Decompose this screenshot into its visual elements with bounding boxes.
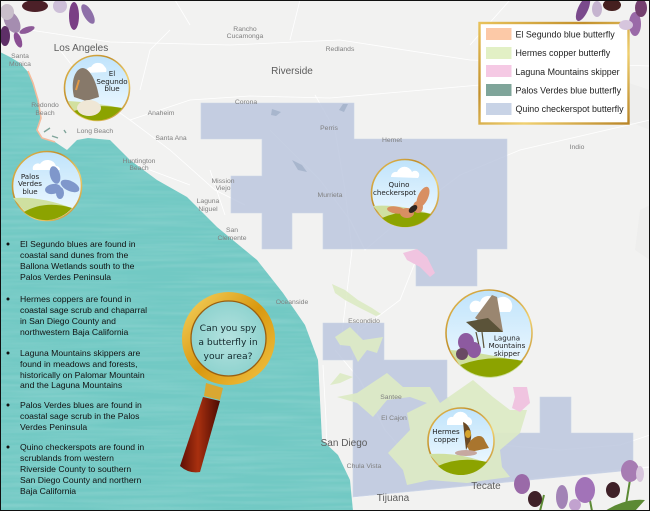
bullet: El Segundo blues: Ballona Wetlands south to the (20, 261, 135, 271)
bullet: Palos Verdes blues (6, 400, 142, 432)
map labels: Long Beach (77, 128, 113, 135)
bullet: Hermes coppers: northwestern Baja California (20, 327, 129, 337)
bullet: Laguna Mountains skippers: found in meadows and forests, (20, 359, 137, 369)
bullet: Hermes coppers: Hermes coppers are found in (20, 294, 131, 304)
icon: butterfly (44, 165, 81, 199)
badge: Palos Verdes blue: blue (22, 187, 38, 196)
bullet: Laguna Mountains skippers (6, 348, 145, 390)
badge: Hermes copper: Hermes (432, 427, 460, 436)
bullet: Quino checkerspots (6, 442, 144, 496)
bullet: Hermes coppers (6, 294, 147, 337)
flowers: bottom right (514, 460, 645, 511)
map labels: Santa (11, 53, 29, 60)
bullet: Quino checkerspots: Baja California (20, 486, 76, 496)
bullet: Palos Verdes blues: coastal sage scrub in the Palos (20, 411, 139, 421)
badge: Hermes copper: copper (434, 435, 458, 444)
badge: Quino checkerspot: Quino (389, 180, 409, 189)
map labels: Redondo (31, 102, 59, 109)
map labels: Santee (380, 394, 402, 401)
icon: butterfly (387, 185, 432, 218)
map labels: Los Angeles (54, 43, 108, 54)
magnifying glass: Can you spy (200, 323, 257, 334)
legend (480, 23, 628, 124)
badge: Hermes copper (428, 408, 494, 475)
bullet: Quino checkerspots: Quino checkerspots are found in (20, 442, 144, 452)
map labels: Huntington (123, 158, 156, 165)
bullet: Quino checkerspots: San Diego County and northern (20, 475, 142, 485)
map labels: Rancho (233, 26, 257, 33)
map labels: Tijuana (377, 493, 410, 504)
bullet: Quino checkerspots: Riverside County to southern (20, 464, 131, 474)
legend item: El Segundo blue butterfly (486, 28, 615, 40)
bullet: Palos Verdes blues: Verdes Peninsula (20, 422, 87, 432)
map labels: San Diego (321, 438, 368, 449)
map labels: Clemente (217, 235, 247, 242)
legend item: Palos Verdes blue butterfly: Palos Verdes blue butterfly (516, 86, 622, 96)
legend item: Laguna Mountains skipper (486, 65, 620, 77)
badge: El Segundo blue: El (109, 69, 115, 78)
bullet: Laguna Mountains skippers: Laguna Mountains skippers are (20, 348, 141, 358)
legend item: Palos Verdes blue butterfly (486, 84, 622, 96)
badge: Laguna Mountains skipper: skipper (494, 349, 520, 358)
bullet: Palos Verdes blues: Palos Verdes blues are found in (20, 400, 142, 410)
map labels: Beach (129, 165, 149, 172)
map labels: El Cajon (381, 415, 407, 422)
bullet: Laguna Mountains skippers: historically on Palomar Mountain (20, 370, 145, 380)
badge: El Segundo blue: Segundo (96, 77, 128, 86)
map labels: Oceanside (276, 299, 308, 306)
map labels: Niguel (198, 206, 218, 213)
badge: Laguna Mountains skipper (446, 290, 532, 378)
map labels: San (226, 227, 238, 234)
map labels: Hemet (382, 137, 402, 144)
species range: Palos Verdes blue butterfly (44, 128, 66, 138)
bullet: Hermes coppers: in San Diego County and (20, 316, 116, 326)
magnifying glass (180, 296, 270, 472)
bullet: Hermes coppers: coastal sage scrub and chaparral (20, 305, 147, 315)
map labels: Santa Ana (155, 135, 187, 142)
legend item: El Segundo blue butterfly: El Segundo blue butterfly (516, 30, 615, 40)
bullet: El Segundo blues: El Segundo blues are found in (20, 239, 136, 249)
legend item: Laguna Mountains skipper: Laguna Mountains skipper (516, 67, 620, 77)
badge: Palos Verdes blue (12, 152, 82, 220)
species range: Quino checkerspot butterfly (201, 103, 633, 497)
map labels: Anaheim (148, 110, 175, 117)
legend item: Quino checkerspot butterfly (486, 103, 624, 115)
map labels: Indio (570, 144, 585, 151)
map labels: Riverside (271, 66, 313, 77)
map labels: Tecate (471, 481, 501, 492)
bullet: El Segundo blues: coastal sand dunes from the (20, 250, 129, 260)
map labels: Monica (9, 61, 31, 68)
bullet: Quino checkerspots: scrublands from western (20, 453, 114, 463)
species range: Hermes copper butterfly (330, 284, 527, 485)
badge: El Segundo blue: blue (104, 84, 120, 93)
species range: El Segundo blue butterfly (28, 71, 55, 142)
badge: Laguna Mountains skipper: Mountains (489, 341, 526, 350)
species range: Laguna Mountains skipper (403, 249, 530, 412)
map labels: Cucamonga (227, 33, 264, 40)
map labels: Chula Vista (347, 463, 382, 470)
map labels: Viejo (216, 185, 231, 192)
magnifying glass: a butterfly in (198, 337, 258, 348)
legend item: Hermes copper butterfly (486, 47, 611, 59)
legend item: Quino checkerspot butterfly: Quino checkerspot butterfly (516, 104, 624, 114)
map labels: Corona (235, 99, 257, 106)
icon: butterfly (463, 422, 471, 450)
ocean (1, 52, 353, 510)
map labels: Perris (320, 125, 338, 132)
icon: butterfly (475, 295, 503, 332)
map labels: Murrieta (318, 192, 343, 199)
map labels: Mission (211, 178, 235, 185)
icon: flower (456, 333, 481, 360)
badge: El Segundo blue (64, 56, 130, 120)
map labels: Redlands (326, 46, 355, 53)
badge: Quino checkerspot (372, 160, 438, 227)
map labels: Beach (35, 110, 55, 117)
icon: flower (77, 100, 101, 116)
bullet: El Segundo blues (6, 239, 136, 282)
badge: Palos Verdes blue: Palos (21, 172, 39, 181)
bullet: El Segundo blues: Palos Verdes Peninsula (20, 272, 111, 282)
icon: butterfly (73, 68, 99, 101)
badge: Laguna Mountains skipper: Laguna (494, 334, 520, 342)
badge: Palos Verdes blue: Verdes (18, 179, 42, 188)
flowers: top left (0, 0, 97, 49)
badge: Quino checkerspot: checkerspot (373, 188, 416, 197)
magnifying glass: your area? (204, 351, 253, 362)
map labels: Laguna (197, 198, 220, 205)
map labels: Escondido (348, 318, 380, 325)
legend item: Hermes copper butterfly: Hermes copper butterfly (516, 48, 611, 58)
flowers: top right (573, 0, 647, 36)
bulleted text (6, 239, 147, 496)
bullet: Laguna Mountains skippers: and the Laguna Mountains (20, 380, 122, 390)
